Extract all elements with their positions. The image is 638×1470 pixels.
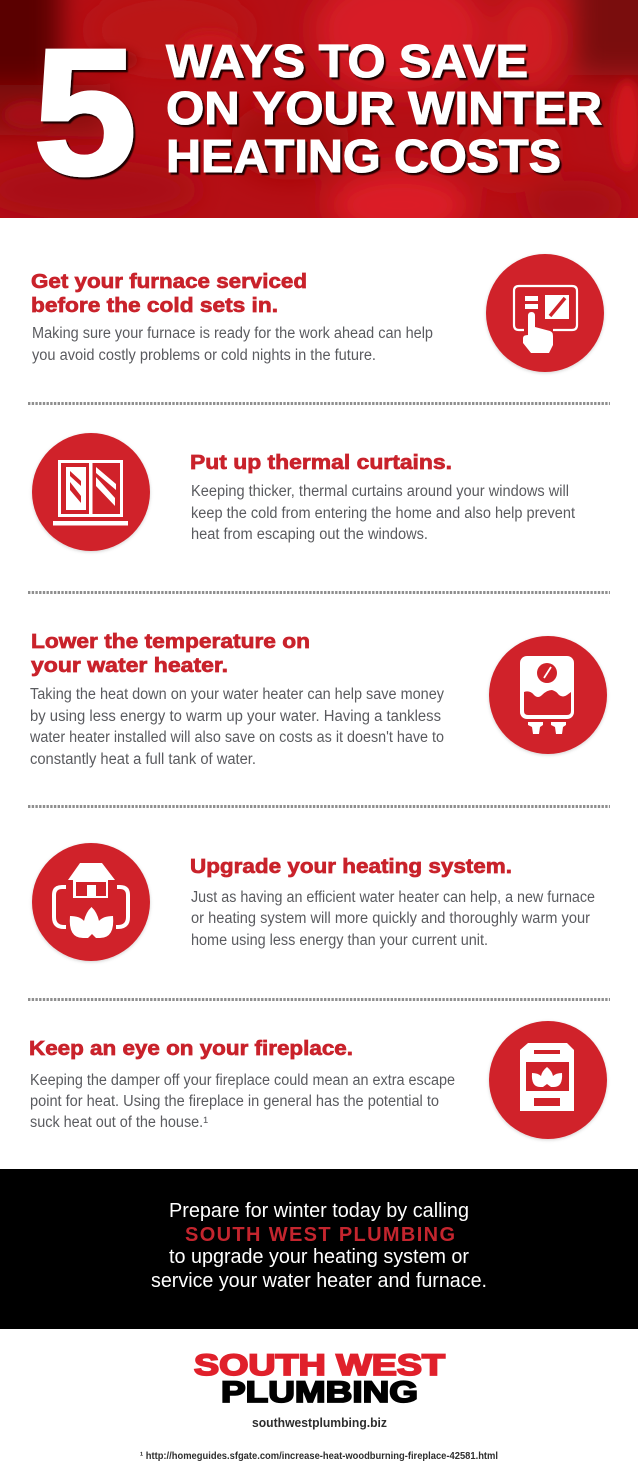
text block: keep the cold from entering the home and also help prevent <box>191 505 576 522</box>
text block <box>191 889 595 949</box>
text block: constantly heat a full tank of water. <box>30 751 256 768</box>
heading: Keep an eye on your fireplace. <box>29 1038 353 1060</box>
text block: home using less energy than your current unit. <box>191 932 488 949</box>
divider 1 <box>28 402 610 405</box>
text block <box>30 1072 455 1131</box>
heading <box>31 631 310 677</box>
header banner <box>0 0 638 240</box>
heading: Lower the temperature on <box>31 631 310 653</box>
text block: you avoid costly problems or cold nights in the future. <box>32 347 376 364</box>
text block: Just as having an efficient water heater can help, a new furnace <box>191 889 595 906</box>
icon: window <box>32 433 150 551</box>
divider 4 <box>28 998 610 1001</box>
heading <box>31 271 307 317</box>
company logo <box>194 1349 445 1409</box>
text block: or heating system will more quickly and thoroughly warm your <box>191 910 590 927</box>
divider 2 <box>28 591 610 594</box>
headline: HEATING COSTS <box>166 130 561 182</box>
website: southwestplumbing.biz <box>252 1415 387 1430</box>
text block: point for heat. Using the fireplace in general has the potential to <box>30 1093 439 1110</box>
footnote: ¹ http://homeguides.sfgate.com/increase-heat-woodburning-fireplace-42581.html <box>140 1451 498 1462</box>
banner photo background <box>0 0 638 240</box>
call to action text: SOUTH WEST PLUMBING <box>185 1224 455 1246</box>
call to action text <box>151 1200 487 1292</box>
heading: Put up thermal curtains. <box>190 452 452 474</box>
heading: before the cold sets in. <box>31 295 278 317</box>
text block: Taking the heat down on your water heater can help save money <box>30 686 444 703</box>
text block <box>191 483 576 543</box>
panel: fireplace <box>29 1021 607 1139</box>
icon: home heating <box>32 843 150 961</box>
heading: Get your furnace serviced <box>31 271 307 293</box>
call to action text: service your water heater and furnace. <box>151 1270 487 1292</box>
big number 5: 5 <box>33 12 137 213</box>
text block: Keeping the damper off your fireplace could mean an extra escape <box>30 1072 455 1089</box>
icon: water heater <box>489 636 607 754</box>
headline <box>166 35 602 182</box>
icon: fireplace <box>489 1021 607 1139</box>
text block <box>29 686 444 768</box>
text block <box>32 325 433 364</box>
call to action text: to upgrade your heating system or <box>169 1246 469 1268</box>
company logo: PLUMBING <box>221 1376 418 1409</box>
text block: suck heat out of the house.¹ <box>30 1114 208 1131</box>
divider 3 <box>28 805 610 808</box>
company logo: SOUTH WEST <box>194 1349 445 1382</box>
panel: heating system <box>32 843 595 961</box>
panel: water heater <box>29 631 607 768</box>
panel: thermal curtains <box>32 433 576 551</box>
text block: Keeping thicker, thermal curtains around your windows will <box>191 483 569 500</box>
headline: WAYS TO SAVE <box>166 35 528 87</box>
text block: heat from escaping out the windows. <box>191 526 428 543</box>
text block: Making sure your furnace is ready for the work ahead can help <box>32 325 433 342</box>
icon: thermostat touch <box>486 254 604 372</box>
call to action text: Prepare for winter today by calling <box>169 1200 469 1222</box>
panel: furnace service <box>31 254 604 372</box>
heading: your water heater. <box>31 655 228 677</box>
headline: ON YOUR WINTER <box>166 82 602 134</box>
heading: Upgrade your heating system. <box>190 856 512 878</box>
text block: by using less energy to warm up your water. Having a tankless <box>30 708 441 725</box>
text block: water heater installed will also save on costs as it doesn't have to <box>29 729 444 746</box>
call to action band <box>0 1169 638 1329</box>
